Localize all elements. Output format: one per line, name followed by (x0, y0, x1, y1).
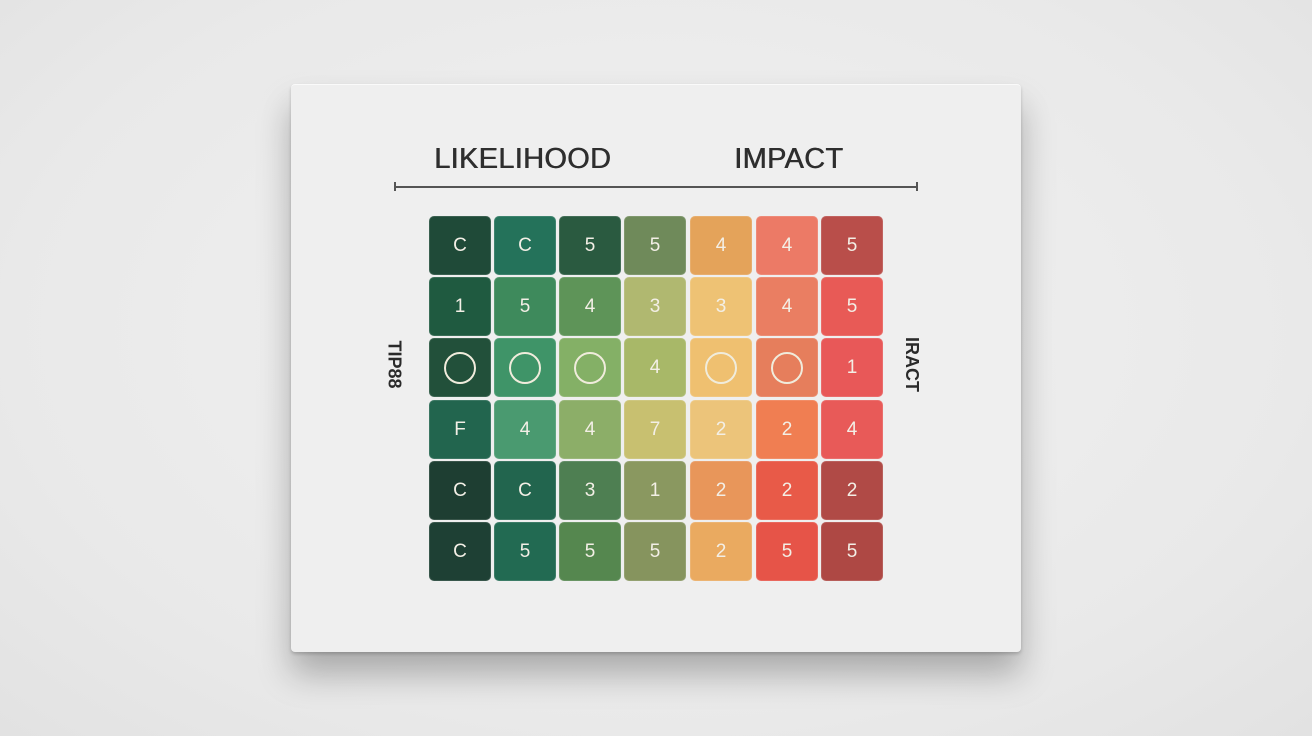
heat map grid: 5 (650, 234, 660, 256)
heat map grid: 4 (520, 418, 530, 440)
heat map grid: 1 (455, 296, 465, 316)
heat map grid: C (453, 480, 467, 500)
heat map grid: 5 (650, 540, 660, 562)
heat map grid: 5 (520, 540, 530, 562)
heat map grid: 5 (847, 234, 857, 256)
heat map grid: 2 (847, 480, 857, 500)
heat map grid: 4 (585, 296, 595, 316)
heat map grid: 5 (782, 540, 792, 562)
heat map grid: 1 (847, 356, 857, 378)
heat map grid: 3 (585, 480, 595, 500)
heat map grid: 3 (716, 296, 726, 316)
heat map grid: 2 (782, 480, 792, 500)
heat map grid: F (454, 418, 466, 440)
heat map grid: 2 (716, 480, 726, 500)
heat map grid: 1 (650, 480, 660, 500)
heat map grid: 2 (782, 418, 792, 440)
heat map grid: 2 (716, 540, 726, 562)
heat map grid: 4 (585, 418, 595, 440)
heat map grid (429, 216, 883, 581)
heat map grid: 4 (782, 296, 792, 316)
heat map grid: 5 (847, 540, 857, 562)
heat map grid: 4 (847, 418, 857, 440)
heading: likelihood: LIKELIHOOD (434, 143, 611, 175)
side label left: TIP88 (385, 340, 405, 389)
heat map grid: 5 (585, 234, 595, 256)
axis line (394, 186, 918, 188)
heat map grid: C (518, 480, 532, 500)
heat map grid: 2 (716, 418, 726, 440)
heat map grid: 7 (650, 418, 660, 440)
heading: impact: IMPACT (734, 143, 843, 175)
heat map grid: 5 (585, 540, 595, 562)
heat map grid: 4 (782, 234, 792, 256)
heat map grid: 4 (716, 234, 726, 256)
side label right: IRACT (902, 337, 922, 392)
heat map grid: 3 (650, 296, 660, 316)
heat map grid: C (453, 234, 467, 256)
card panel (291, 84, 1021, 652)
heat map grid: C (453, 540, 467, 562)
heat map grid: 5 (847, 296, 857, 316)
heat map grid: C (518, 234, 532, 256)
heat map grid: 5 (520, 296, 530, 316)
heat map grid: 4 (650, 356, 660, 378)
